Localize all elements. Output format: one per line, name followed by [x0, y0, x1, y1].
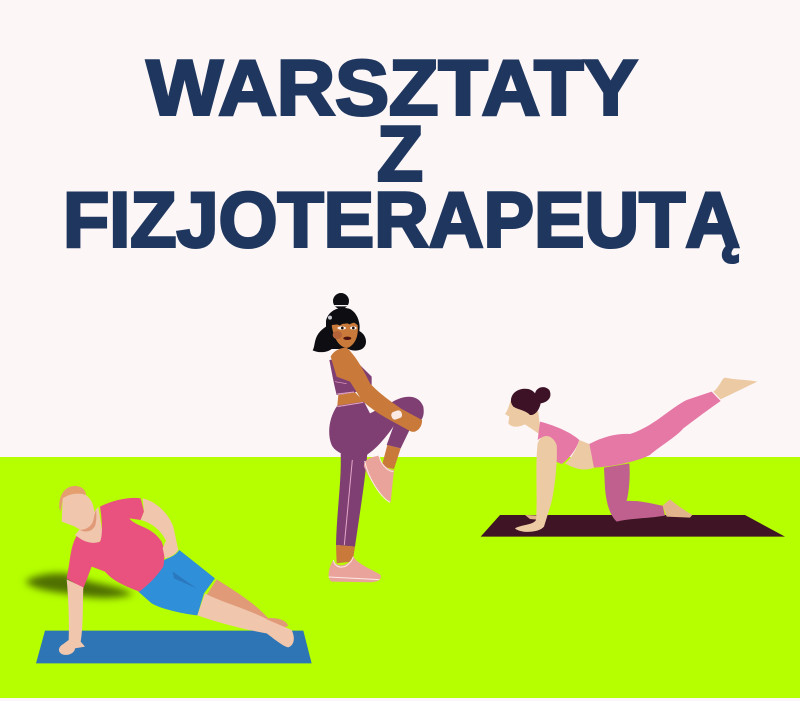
- figure: man in side plank on blue mat: [25, 486, 312, 663]
- title: WARSZTATY: [146, 44, 638, 132]
- raised shoe: [364, 456, 394, 502]
- figure: woman standing and holding raised knee: [313, 293, 424, 582]
- shadow: [25, 573, 133, 598]
- shirt: [67, 498, 164, 592]
- face: [332, 322, 358, 348]
- crop top: [538, 422, 579, 464]
- ankle: [336, 545, 355, 563]
- raised foot: [713, 378, 757, 399]
- raised calf: [387, 425, 411, 448]
- eyes: [337, 326, 346, 330]
- hair: [313, 308, 366, 352]
- supporting arm: [59, 579, 85, 655]
- face and neck: [505, 398, 541, 435]
- waist: [337, 392, 365, 406]
- title: FIZJOTERAPEUTĄ: [63, 176, 740, 264]
- front leg: [197, 593, 294, 647]
- lower foot: [663, 499, 692, 518]
- standing leg: [336, 453, 367, 547]
- figure: woman on all fours on dark mat: [481, 378, 785, 537]
- hair bun: [333, 293, 349, 309]
- bent leg: [604, 463, 665, 522]
- back leg: [207, 579, 288, 628]
- raised arm: [141, 498, 178, 558]
- front arm: [515, 436, 557, 532]
- dark mat: [481, 515, 785, 537]
- shorts: [138, 550, 215, 615]
- raised leg: [589, 392, 721, 468]
- lips: [343, 337, 351, 340]
- bra top: [329, 358, 372, 395]
- standing shoe: [329, 557, 381, 582]
- arm: [331, 348, 422, 432]
- title: Z: [377, 110, 423, 198]
- fringe: [329, 315, 358, 327]
- raised ankle: [382, 445, 401, 469]
- title: [63, 44, 740, 264]
- green floor: [0, 457, 800, 698]
- hair: [59, 486, 86, 512]
- neck shadow: [80, 509, 96, 531]
- belly: [565, 440, 594, 470]
- hair: [511, 387, 550, 415]
- hair clip: [328, 316, 332, 320]
- back hand: [525, 515, 542, 520]
- head: [62, 494, 94, 530]
- watch: [390, 409, 403, 421]
- blue mat: [36, 631, 312, 663]
- cheek: [333, 331, 342, 339]
- hip and thigh: [329, 397, 424, 456]
- neck and chest: [75, 507, 103, 545]
